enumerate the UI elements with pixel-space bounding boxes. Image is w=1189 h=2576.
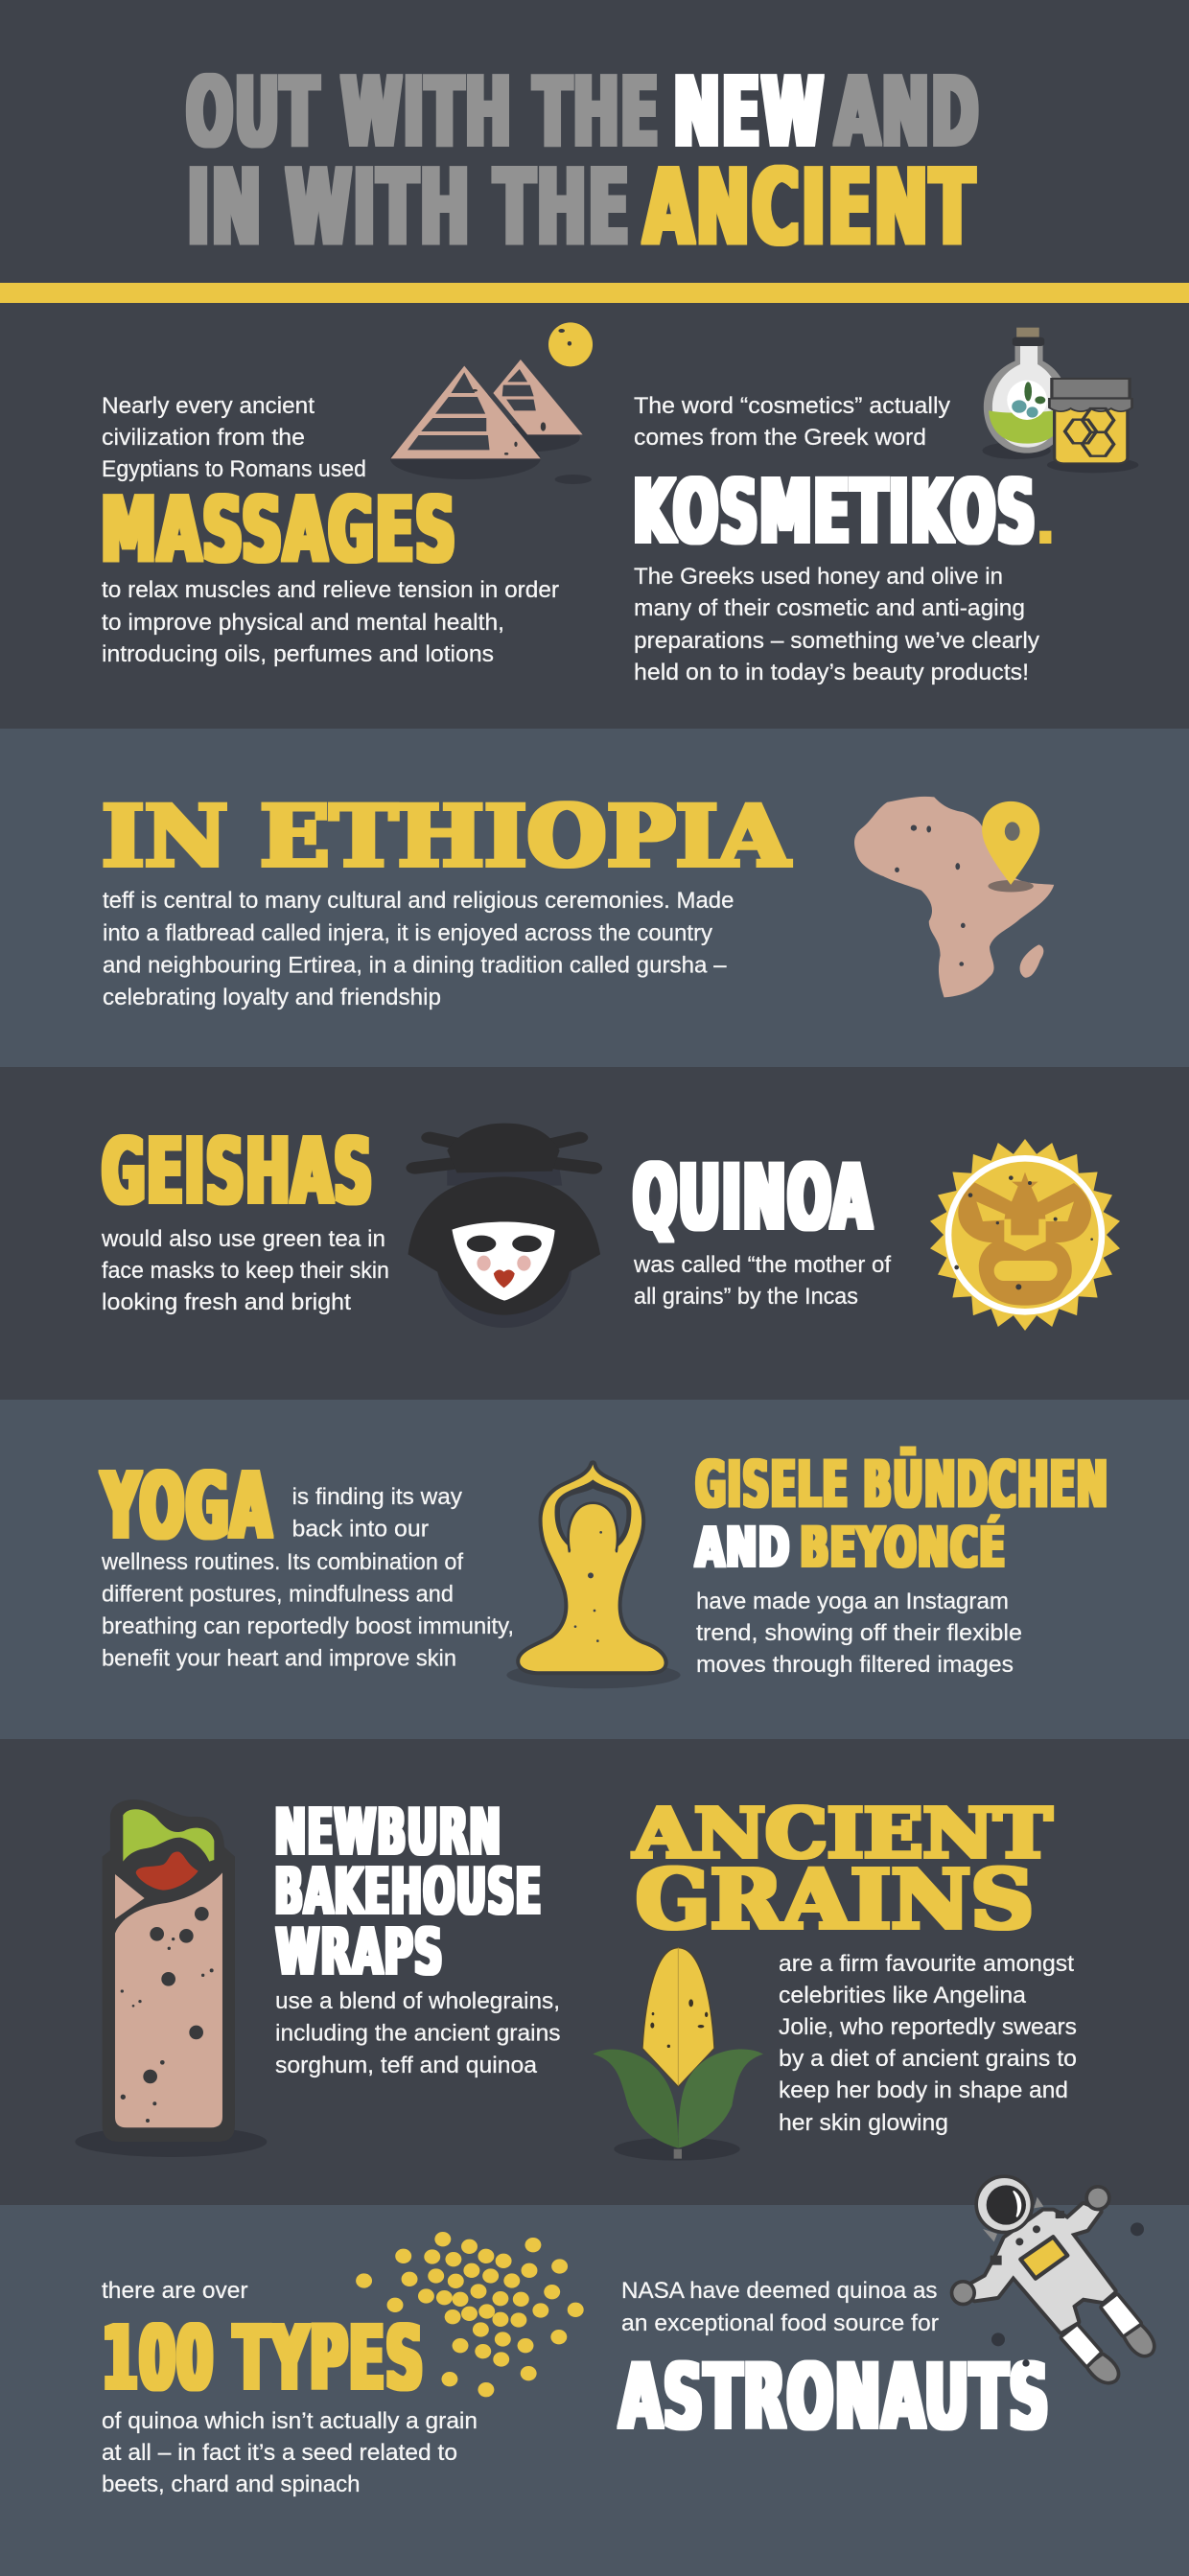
icon: geisha — [408, 1124, 600, 1328]
text: geishas body: looking fresh and bright — [102, 1289, 351, 1315]
text: ethiopia body: and neighbouring Ertirea, in a dining tradition called gursha – — [103, 953, 727, 978]
text: ethiopia body: teff is central to many cultural and religious ceremonies. Made — [103, 888, 734, 914]
text: nasa intro: an exceptional food source for — [621, 2310, 939, 2336]
icon: inca sun mask badge — [930, 1139, 1120, 1331]
text: quinoa body: all grains” by the Incas — [634, 1284, 858, 1310]
text: ancient grains body: Jolie, who reportedly swears — [779, 2014, 1077, 2040]
text: yoga body: is finding its way — [291, 1484, 463, 1510]
text: ancient grains body: celebrities like Angelina — [779, 1983, 1026, 2008]
heading: newburn bakehouse wraps — [274, 1795, 543, 1989]
text: ethiopia body — [103, 888, 734, 1010]
text: massages body: to relax muscles and relieve tension in order — [102, 577, 559, 603]
panel: ethiopia — [0, 729, 1189, 1067]
heading: newburn bakehouse wraps: NEWBURN — [274, 1795, 502, 1869]
panel: yoga — [0, 1400, 1189, 1739]
text: massages body — [102, 577, 559, 667]
text: massages intro: Nearly every ancient — [102, 393, 315, 419]
text: kosmetikos body: The Greeks used honey and olive in — [634, 564, 1003, 590]
text: ancient grains body — [779, 1951, 1077, 2136]
text: there are over: there are over — [102, 2278, 248, 2304]
text: massages body: introducing oils, perfumes and lotions — [102, 641, 494, 667]
icon: corn — [593, 1948, 763, 2161]
heading: kosmetikos: . — [1033, 481, 1059, 560]
icon: quinoa seeds — [356, 2232, 584, 2397]
text: quinoa body: was called “the mother of — [633, 1252, 891, 1278]
text: instagram body: have made yoga an Instagram — [696, 1589, 1009, 1614]
text: kosmetikos body — [634, 564, 1040, 685]
heading: 100 types: 100 TYPES — [102, 2307, 425, 2410]
text: yoga body: benefit your heart and improve skin — [102, 1645, 456, 1672]
icon: africa map with pin — [854, 797, 1054, 997]
panel: geishas and quinoa — [0, 1067, 1189, 1400]
text: yoga body — [101, 1484, 514, 1672]
heading: ancient grains: ANCIENT — [633, 1793, 1052, 1873]
text: instagram body: moves through filtered images — [696, 1652, 1014, 1678]
heading: massages: MASSAGES — [102, 478, 457, 583]
text: cosmetics intro: comes from the Greek word — [634, 425, 926, 451]
text: wraps body — [275, 1988, 560, 2078]
text: yoga body: back into our — [291, 1517, 429, 1542]
title: AND — [836, 56, 980, 169]
text: cosmetics intro: The word “cosmetics” actually — [634, 393, 951, 419]
text: quinoa seed body — [102, 2408, 478, 2497]
heading: ancient grains: GRAINS — [636, 1852, 1034, 1948]
icon: pyramids and sun — [390, 322, 593, 484]
heading: yoga: YOGA — [102, 1453, 273, 1559]
heading: gisele bündchen and beyoncé — [696, 1446, 1108, 1580]
text: quinoa seed body: at all – in fact it’s a seed related to — [102, 2440, 457, 2466]
text: geishas body: face masks to keep their skin — [102, 1258, 389, 1284]
text: nasa intro — [621, 2278, 939, 2336]
text: ethiopia body: celebrating loyalty and friendship — [103, 985, 441, 1010]
heading: geishas: GEISHAS — [102, 1120, 374, 1225]
icon: olive oil bottle and honey jar — [982, 328, 1138, 473]
heading: newburn bakehouse wraps: WRAPS — [276, 1915, 444, 1989]
title: ANCIENT — [644, 147, 976, 268]
title: NEW — [673, 56, 825, 169]
heading: gisele bündchen and beyoncé: BEYONCÉ — [800, 1515, 1007, 1580]
text: ancient grains body: keep her body in shape and — [779, 2077, 1068, 2103]
text: instagram body — [696, 1589, 1022, 1678]
text: instagram body: trend, showing off their flexible — [696, 1620, 1022, 1646]
text: wraps body: sorghum, teff and quinoa — [275, 2053, 537, 2078]
text: massages intro — [102, 393, 366, 482]
text: yoga body: wellness routines. Its combination of — [101, 1549, 463, 1575]
icon: astronaut — [953, 2178, 1153, 2381]
icon: wrap — [75, 1799, 267, 2157]
text: ancient grains body: are a firm favourite amongst — [779, 1951, 1074, 1977]
text: quinoa body — [633, 1252, 891, 1310]
text: geishas body — [101, 1226, 389, 1315]
heading: in ethiopia: IN ETHIOPIA — [102, 786, 791, 886]
title — [186, 56, 980, 268]
text: ancient grains body: her skin glowing — [779, 2110, 948, 2136]
heading: ancient grains — [633, 1793, 1052, 1948]
text: geishas body: would also use green tea in — [101, 1226, 385, 1252]
text: kosmetikos body: preparations – something we’ve clearly — [634, 628, 1040, 654]
icon: meditating figure — [506, 1464, 681, 1688]
text: kosmetikos body: held on to in today’s beauty products! — [634, 660, 1029, 685]
panel: header and massages/kosmetikos — [0, 0, 1189, 729]
panel: wraps and ancient grains — [0, 1739, 1189, 2205]
text: quinoa seed body: beets, chard and spinach — [102, 2472, 361, 2497]
heading: quinoa: QUINOA — [633, 1147, 873, 1250]
text: yoga body: breathing can reportedly boost immunity, — [102, 1613, 514, 1639]
heading: gisele bündchen and beyoncé: AND — [696, 1516, 790, 1580]
text: nasa intro: NASA have deemed quinoa as — [621, 2278, 938, 2304]
title: OUT WITH THE — [186, 56, 660, 169]
heading: newburn bakehouse wraps: BAKEHOUSE — [274, 1854, 543, 1929]
text: wraps body: use a blend of wholegrains, — [275, 1988, 560, 2014]
panel: quinoa types and astronauts — [0, 2178, 1189, 2576]
text: wraps body: including the ancient grains — [275, 2021, 560, 2046]
text: yoga body: different postures, mindfulness and — [102, 1582, 454, 1607]
text: ancient grains body: by a diet of ancient grains to — [779, 2046, 1077, 2072]
text: kosmetikos body: many of their cosmetic and anti-aging — [634, 595, 1025, 621]
text: massages intro: civilization from the — [102, 425, 305, 451]
text: quinoa seed body: of quinoa which isn’t actually a grain — [102, 2408, 478, 2434]
text: cosmetics intro — [634, 393, 951, 451]
title: IN WITH THE — [188, 147, 631, 268]
text: ethiopia body: into a flatbread called injera, it is enjoyed across the country — [103, 920, 713, 946]
text: massages body: to improve physical and mental health, — [102, 610, 504, 636]
text: massages intro: Egyptians to Romans used — [102, 456, 366, 482]
